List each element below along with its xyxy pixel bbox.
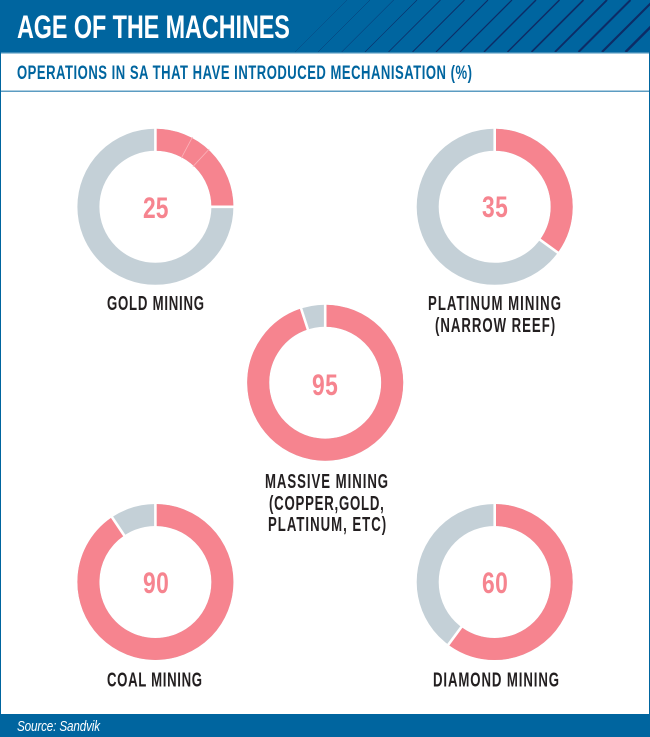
label: platinum mining: PLATINUM MINING — [428, 292, 561, 315]
label: platinum mining — [428, 292, 561, 337]
label: gold mining: GOLD MINING — [107, 292, 204, 315]
donut: massive mining 95 — [258, 303, 392, 450]
donut: coal mining 90 — [88, 502, 222, 649]
label: massive mining: PLATINUM, ETC) — [268, 513, 386, 536]
label: massive mining — [265, 470, 388, 536]
header banner — [0, 0, 650, 52]
label: massive mining: MASSIVE MINING — [265, 470, 388, 493]
value: massive 95: 95 — [312, 368, 338, 402]
value: coal 90: 90 — [143, 566, 169, 600]
label: coal mining: COAL MINING — [107, 669, 202, 691]
label: platinum mining: (NARROW REEF) — [435, 314, 555, 337]
title: AGE OF THE MACHINES — [17, 8, 290, 45]
donut: diamond mining 60 — [428, 502, 562, 649]
value: platinum 35: 35 — [482, 190, 508, 224]
subtitle: OPERATIONS IN SA THAT HAVE INTRODUCED MECHANISATION (%) — [17, 61, 472, 84]
source: Source: Sandvik — [17, 718, 101, 734]
value: diamond 60: 60 — [482, 566, 508, 600]
donut: platinum mining 35 — [428, 127, 562, 274]
value: gold 25: 25 — [143, 191, 169, 225]
label: diamond mining: DIAMOND MINING — [433, 669, 559, 691]
donut: gold mining 25 — [88, 127, 235, 274]
label: massive mining: (COPPER,GOLD, — [269, 492, 384, 515]
footer bar — [0, 714, 650, 737]
